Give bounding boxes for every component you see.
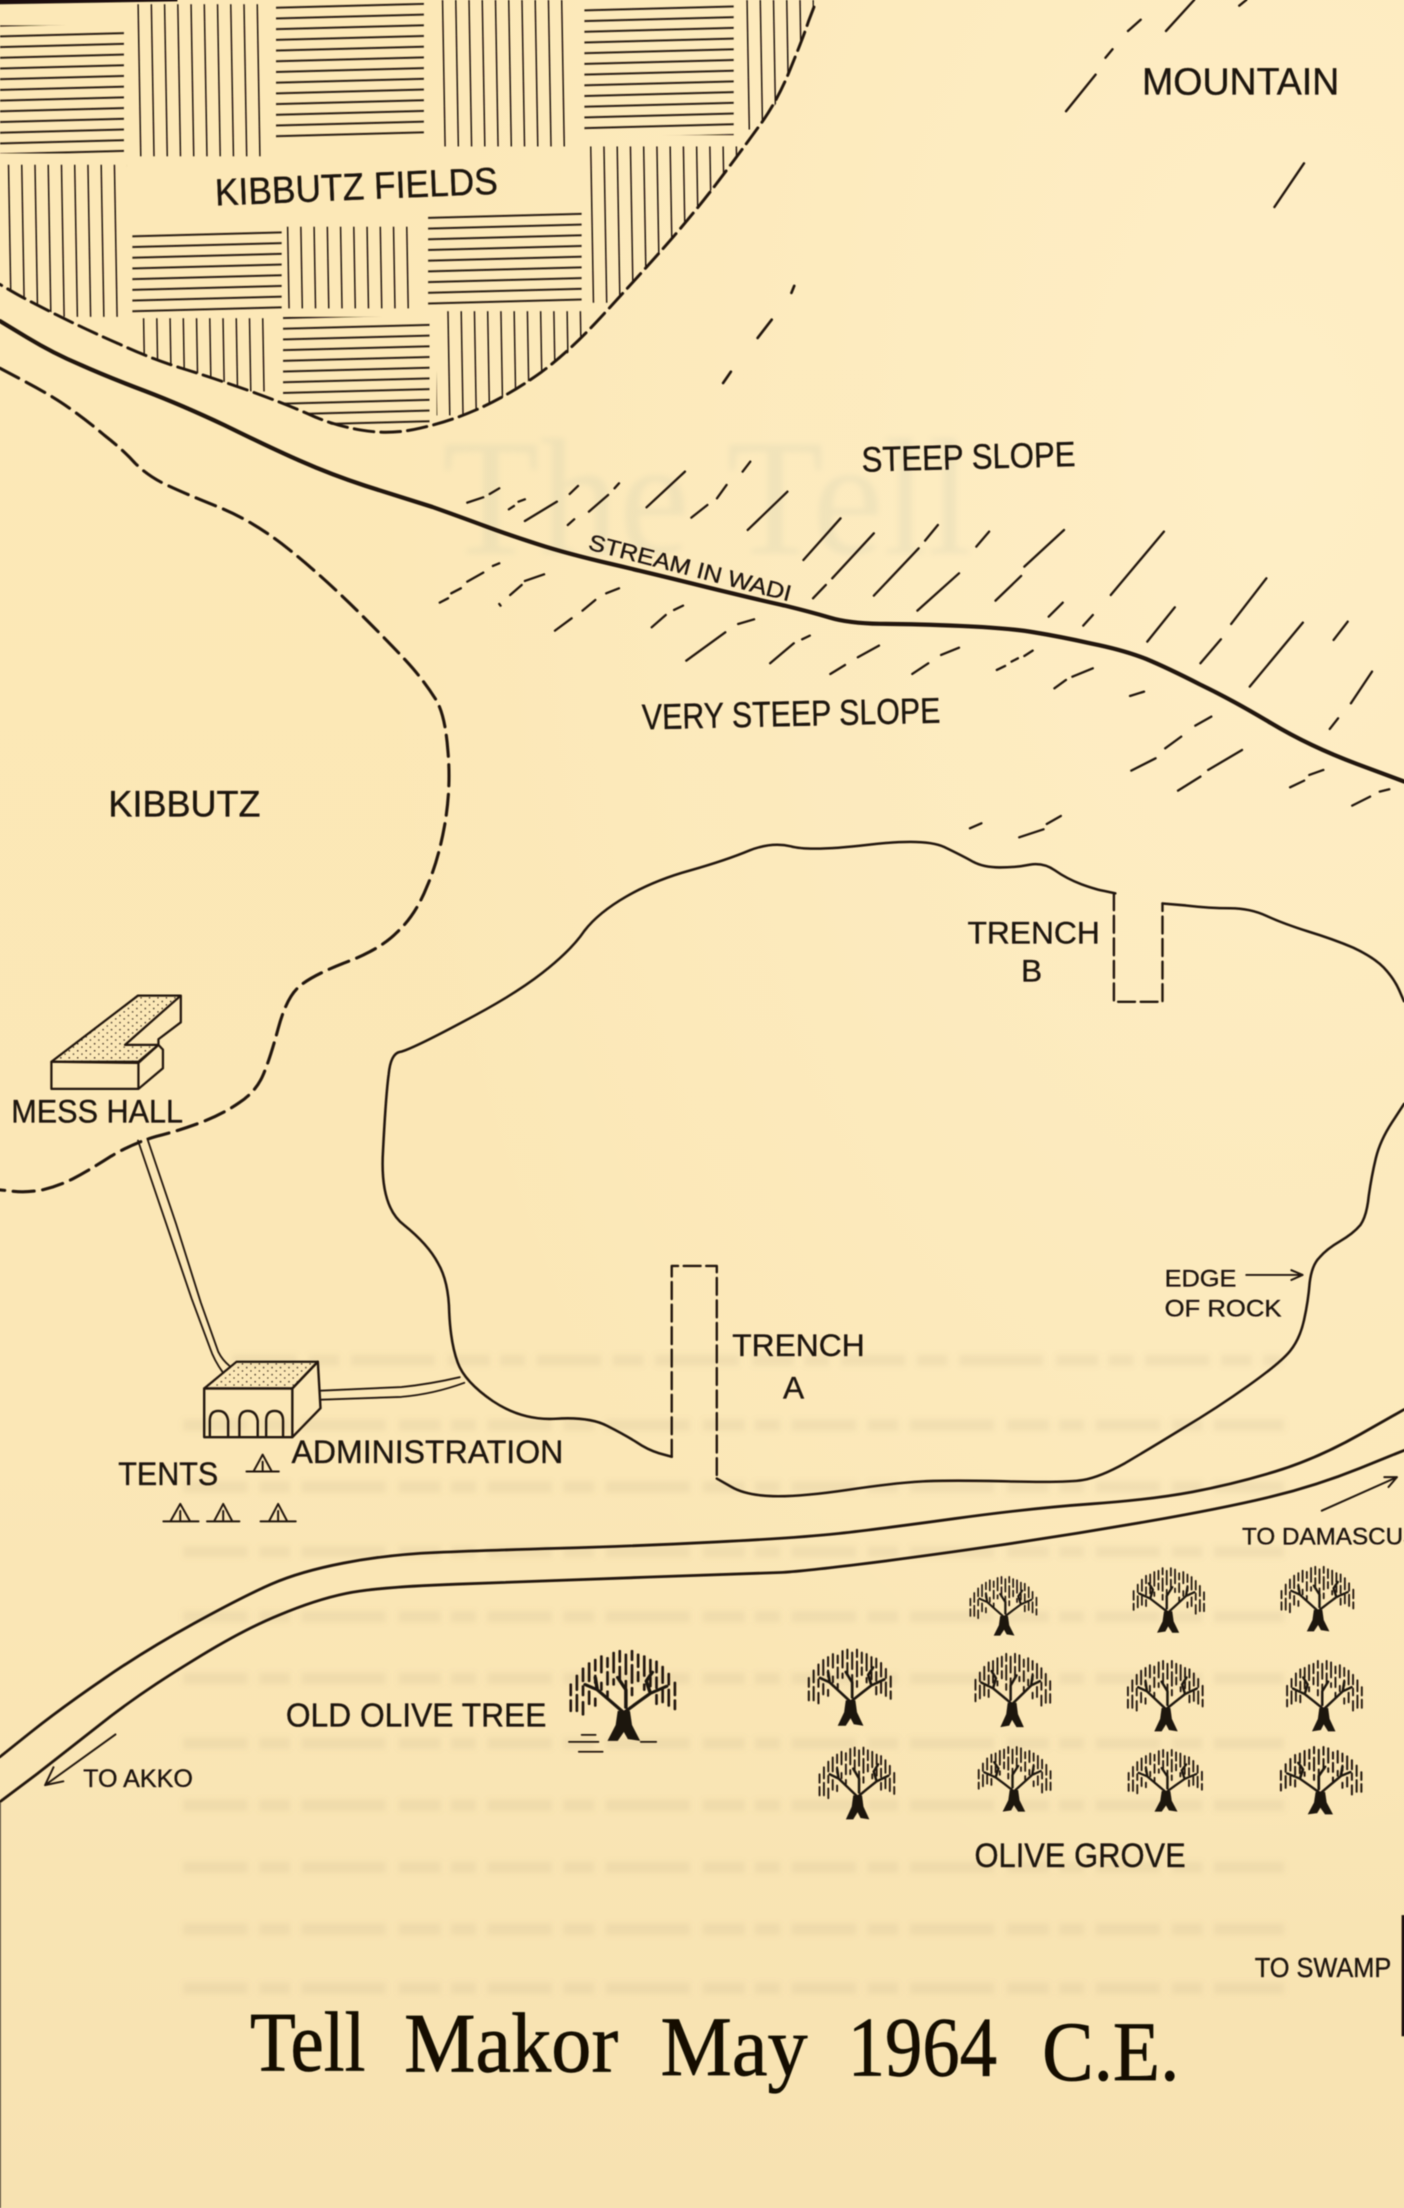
road: lower edge xyxy=(0,1450,1404,1802)
trench A dashed outline xyxy=(672,1266,717,1479)
panel: kibbutz fields xyxy=(0,0,814,432)
label: stream in wadi: STREAM IN WADI xyxy=(586,530,794,606)
label: to swamp: TO SWAMP xyxy=(1255,1952,1391,1983)
kibbutz boundary dashed line xyxy=(0,368,449,1192)
edge of rock outline with trenches xyxy=(383,842,1404,1496)
label: kibbutz: KIBBUTZ xyxy=(108,784,261,825)
icon: tents xyxy=(163,1455,296,1521)
trench B dashed outline xyxy=(1114,893,1162,1002)
road: upper edge xyxy=(0,1410,1404,1757)
title xyxy=(250,1997,1179,2099)
path: mess hall to administration xyxy=(138,1139,230,1373)
title: 1964 xyxy=(848,2002,997,2095)
path: administration to rock xyxy=(321,1377,464,1400)
arrow stem: to swamp xyxy=(1402,1915,1404,2036)
field hatching blocks xyxy=(0,0,814,427)
mountain ticks xyxy=(1066,0,1304,207)
slope hatch marks xyxy=(440,462,1389,837)
title: Makor xyxy=(404,1997,618,2090)
label: trench A: TRENCH xyxy=(732,1327,865,1363)
olive grove trees xyxy=(809,1567,1362,1819)
top edge stroke xyxy=(0,0,176,3)
icon: mess hall building xyxy=(51,996,181,1089)
title: Tell xyxy=(250,1997,365,2090)
label: steep slope: STEEP SLOPE xyxy=(861,435,1076,480)
left page edge xyxy=(0,1802,1,2208)
icon: old olive tree xyxy=(569,1651,675,1752)
stream in wadi line xyxy=(0,321,1404,782)
label: very steep slope: VERY STEEP SLOPE xyxy=(641,691,941,737)
icon: administration building xyxy=(204,1362,321,1437)
label: olive grove: OLIVE GROVE xyxy=(974,1837,1186,1875)
label: tents: TENTS xyxy=(118,1456,218,1492)
label: mountain: MOUNTAIN xyxy=(1142,61,1339,103)
field boundary dashed xyxy=(0,7,814,432)
show-through: faint paragraph from reverse page xyxy=(183,1360,1284,1988)
label: administration: ADMINISTRATION xyxy=(292,1434,563,1470)
label: old olive tree: OLD OLIVE TREE xyxy=(286,1697,546,1734)
slope ticks near fields xyxy=(723,286,794,383)
title: C.E. xyxy=(1042,2006,1179,2099)
label: edge of rock: EDGE xyxy=(1165,1265,1236,1292)
label: to Akko: TO AKKO xyxy=(83,1765,193,1793)
label: B: B xyxy=(1021,952,1042,988)
rock edge solid line xyxy=(383,842,1404,1496)
title: May xyxy=(660,2001,808,2094)
arrow: to Damascus xyxy=(1322,1477,1397,1511)
label: kibbutz fields: KIBBUTZ FIELDS xyxy=(214,161,499,215)
arrow: to Akko xyxy=(45,1734,115,1785)
label: of rock: OF ROCK xyxy=(1165,1296,1282,1323)
arrow: edge of rock xyxy=(1246,1270,1303,1280)
label: trench B: TRENCH xyxy=(967,914,1100,950)
label: A: A xyxy=(783,1369,805,1405)
show-through: faint heading from reverse page: The Tell xyxy=(442,405,972,589)
label: mess hall: MESS HALL xyxy=(11,1093,183,1129)
